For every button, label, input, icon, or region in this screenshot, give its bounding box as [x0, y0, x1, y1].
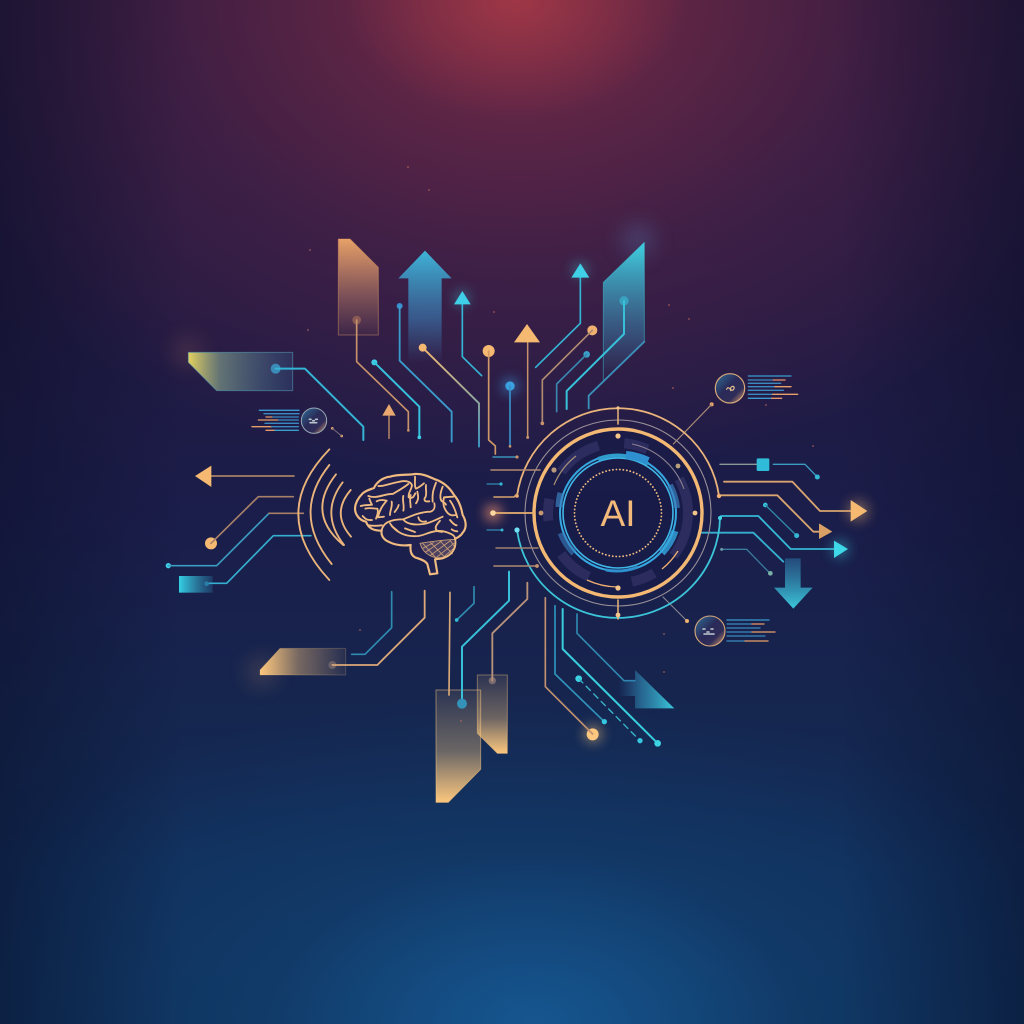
blue rings — [559, 455, 677, 571]
lower circuit group — [260, 572, 674, 802]
outer arcs — [517, 408, 719, 496]
panel: tall orange card — [436, 690, 481, 802]
core dots and ticks — [514, 406, 722, 619]
panel: orange top card — [338, 239, 410, 432]
sound wave arcs — [298, 449, 351, 580]
dotted ring — [574, 470, 662, 556]
data lines and globe: upper left — [252, 408, 343, 437]
globe and data lines: upper right — [673, 374, 798, 444]
cerebellum — [420, 539, 455, 559]
upper-right circuit group — [505, 242, 867, 609]
arrow: orange left — [195, 466, 294, 487]
AI label: AI — [601, 493, 635, 534]
panel: lower left orange card — [260, 591, 425, 675]
circuit traces: lower left — [166, 497, 311, 583]
AI core rings — [514, 406, 722, 619]
panel: cyan small box — [179, 576, 213, 593]
panel: short orange card — [477, 675, 507, 753]
lower right globe and data lines — [663, 597, 775, 646]
circuit traces: top middle — [371, 303, 495, 454]
arrow: cyan up — [536, 263, 589, 367]
traces with dots — [540, 325, 597, 425]
arrow: teal lower right — [618, 670, 674, 708]
arrow: large blue up — [398, 251, 452, 363]
panel: cyan slanted card — [567, 242, 644, 409]
icon: brain — [355, 474, 466, 574]
particles — [307, 166, 814, 722]
segmented band — [548, 443, 688, 587]
brain outline — [355, 474, 466, 574]
trace: blue lower left — [352, 592, 392, 654]
arrow: small orange up — [382, 404, 396, 438]
panel: yellow left card — [188, 352, 363, 440]
dark disc — [534, 429, 702, 597]
thick orange ring — [534, 429, 702, 597]
left connectors of AI core — [487, 455, 540, 568]
brain folds — [361, 477, 457, 539]
blue dot trace — [505, 381, 515, 448]
upper-left circuit group — [166, 239, 495, 593]
arrow: orange up — [514, 324, 540, 439]
arrow: small cyan up — [454, 291, 482, 376]
traces: lower right — [545, 598, 661, 747]
traces: lower center — [449, 572, 527, 709]
arrow: big cyan down — [774, 558, 813, 609]
right side traces and arrows — [702, 458, 867, 576]
glows — [176, 226, 869, 743]
